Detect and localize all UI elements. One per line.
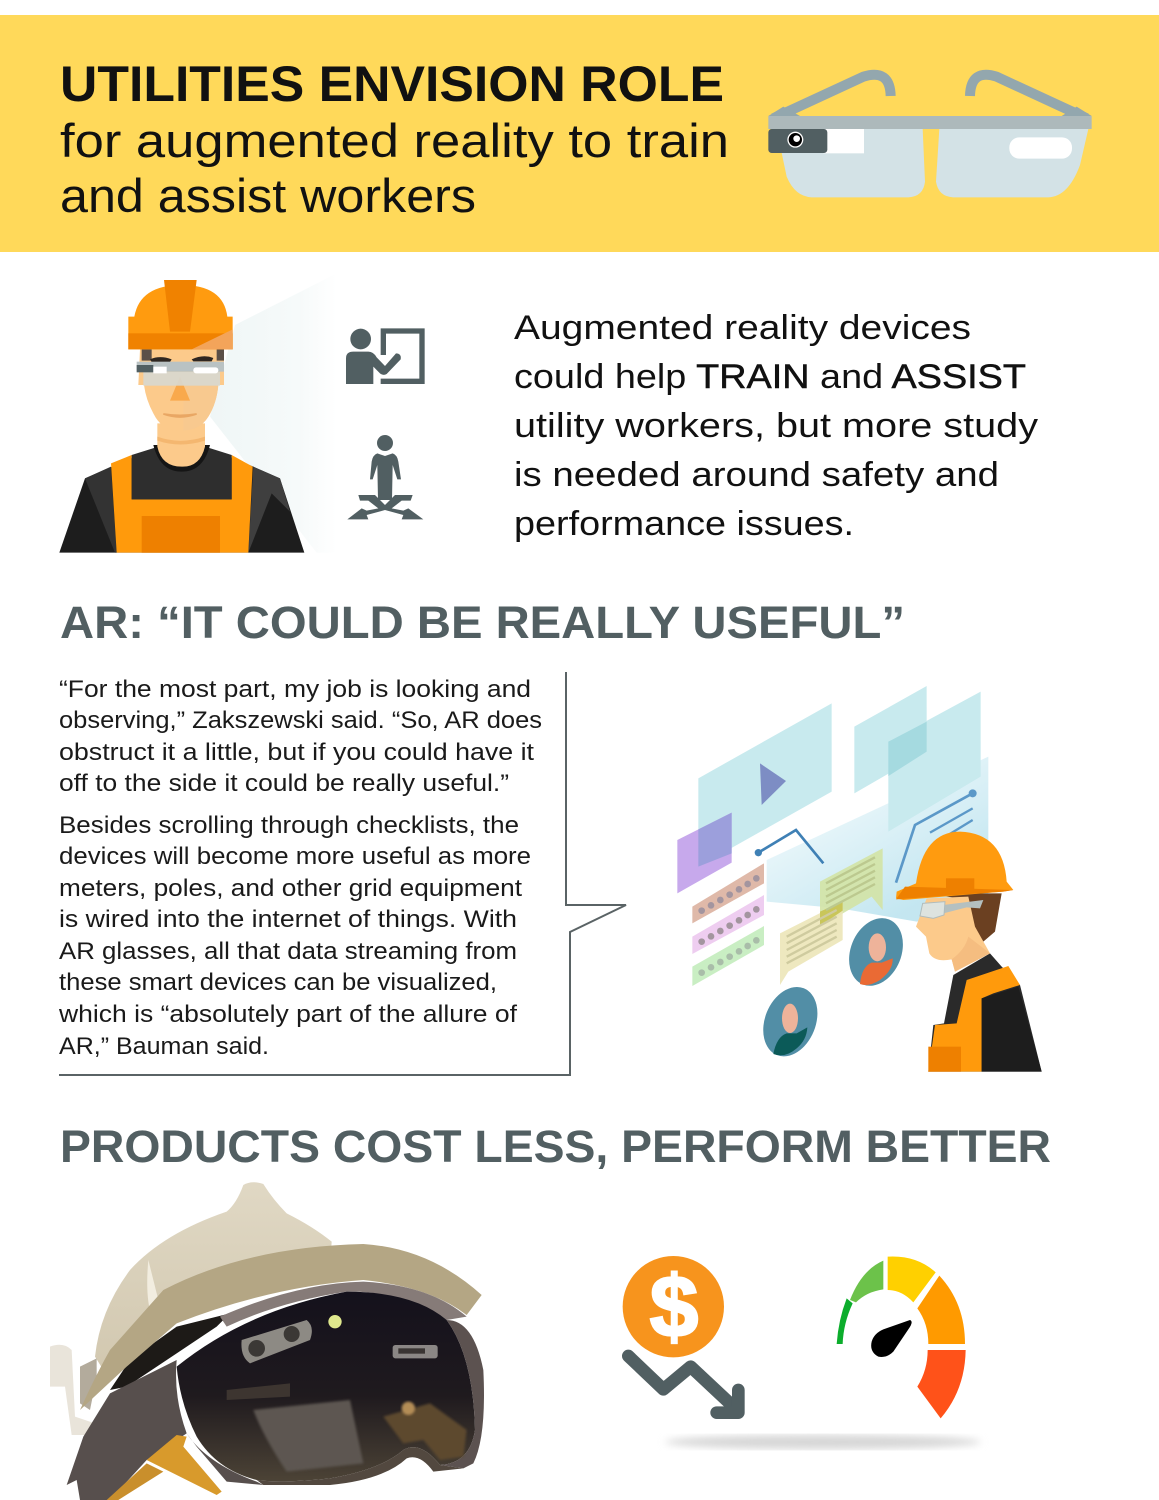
body: intro paragraph: could help TRAIN and ASSIST — [514, 358, 1026, 396]
callout: quote text and speech frame: off to the side it could be really useful.” — [59, 770, 509, 797]
icon: trainer at board — [346, 328, 425, 384]
icon: falling cost — [623, 1256, 738, 1413]
heading: products cost less: PRODUCTS COST LESS, PERFORM BETTER — [60, 1121, 1051, 1172]
callout: quote text and speech frame: is wired into the internet of things. With — [59, 906, 517, 933]
title: for augmented reality to train — [60, 114, 729, 167]
callout: quote text and speech frame: devices will become more useful as more — [59, 843, 531, 870]
body: intro paragraph: utility workers, but more study — [514, 407, 1038, 445]
icon: falling cost: $ — [650, 1258, 698, 1356]
callout: quote text and speech frame: these smart devices can be visualized, — [59, 969, 497, 996]
callout: quote text and speech frame: which is “absolutely part of the allure of — [58, 1001, 517, 1028]
callout: quote text and speech frame: meters, poles, and other grid equipment — [59, 875, 522, 902]
callout: quote text and speech frame: AR glasses, all that data streaming from — [59, 938, 517, 965]
side-view worker — [896, 832, 1042, 1072]
list rows — [692, 863, 764, 986]
callout: quote text and speech frame: AR,” Bauman said. — [59, 1033, 269, 1060]
callout: quote text and speech frame — [58, 672, 626, 1075]
gauge shadow — [665, 1435, 981, 1449]
icon: AR glasses — [768, 75, 1092, 197]
icon: person at crossroads — [347, 435, 423, 519]
photo: HoloLens hard hat — [50, 1182, 484, 1500]
avatars — [753, 910, 913, 1065]
callout: quote text and speech frame: obstruct it a little, but if you could have it — [59, 739, 534, 766]
header banner — [0, 15, 1159, 252]
callout: quote text and speech frame: “For the most part, my job is looking and — [59, 676, 531, 703]
body: intro paragraph — [514, 309, 1038, 543]
callout: quote text and speech frame: Besides scrolling through checklists, the — [59, 812, 519, 839]
body: intro paragraph: is needed around safety and — [514, 456, 999, 494]
chat bubbles — [780, 848, 883, 985]
icon: performance gauge — [837, 1257, 966, 1418]
body: intro paragraph: Augmented reality devices — [514, 309, 971, 347]
illustration: worker with AR glasses — [59, 273, 337, 553]
title: UTILITIES ENVISION ROLE — [60, 56, 724, 112]
title: and assist workers — [60, 169, 476, 222]
heading: AR useful: AR: “IT COULD BE REALLY USEFUL” — [60, 597, 905, 648]
illustration: worker viewing AR panels — [677, 686, 1042, 1072]
callout: quote text and speech frame: observing,” Zakszewski said. “So, AR does — [59, 707, 542, 734]
body: intro paragraph: performance issues. — [514, 505, 854, 543]
title — [60, 56, 729, 222]
